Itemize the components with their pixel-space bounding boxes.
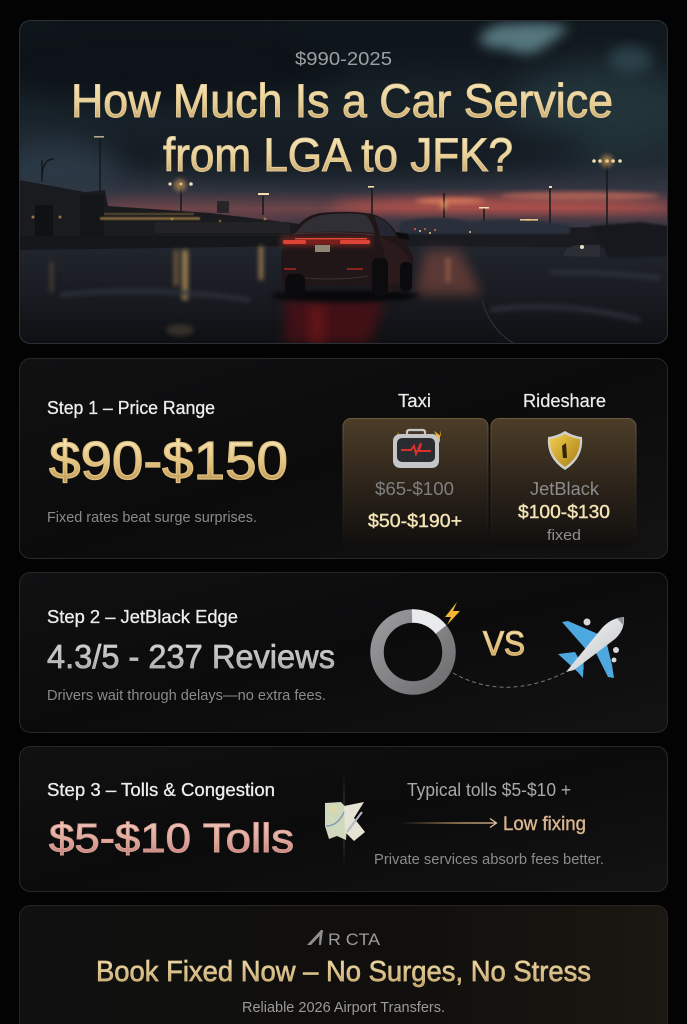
step 1 price: $90-$150 xyxy=(49,431,288,491)
tolls line: Typical tolls $5-$10 + xyxy=(407,780,571,800)
panel: step 1 price range xyxy=(20,358,668,558)
low fixing label: Low fixing xyxy=(503,814,586,835)
comparison column: rideshare / JetBlack: Rideshare xyxy=(523,391,606,411)
comparison column: taxi xyxy=(343,391,488,548)
cta eyebrow with logo mark xyxy=(307,930,381,949)
hero title: How Much Is a Car Service xyxy=(71,74,613,127)
car rear view xyxy=(271,212,419,302)
comparison column: rideshare / JetBlack xyxy=(491,391,636,548)
hero subtitle: $990-2025 xyxy=(295,49,392,69)
comparison column: rideshare / JetBlack: $100-$130 xyxy=(518,501,610,522)
comparison column: taxi: Taxi xyxy=(398,391,431,411)
step 2 rating: 4.3/5 - 237 Reviews xyxy=(47,638,335,675)
step 1 note: Fixed rates beat surge surprises. xyxy=(47,510,257,526)
icon: gold shield xyxy=(548,431,582,470)
hero title: from LGA to JFK? xyxy=(163,128,513,181)
icon: lightning bolt xyxy=(445,602,460,625)
panel: step 3 tolls and congestion xyxy=(20,746,668,892)
comparison column: taxi: $65-$100 xyxy=(375,478,454,499)
icon: taxi meter with lightning xyxy=(393,430,441,468)
panel: hero photo with title xyxy=(0,20,687,344)
arrow xyxy=(400,818,496,828)
cta headline: Book Fixed Now – No Surges, No Stress xyxy=(96,956,591,988)
cta note: Reliable 2026 Airport Transfers. xyxy=(242,1000,445,1016)
hero title xyxy=(71,74,613,181)
comparison column: rideshare / JetBlack: JetBlack xyxy=(530,478,600,499)
panel: step 2 JetBlack edge xyxy=(20,572,668,732)
step 2 heading: Step 2 – JetBlack Edge xyxy=(47,606,238,627)
icon: folded map xyxy=(325,802,365,841)
skyline lights and poles xyxy=(19,136,668,258)
ring gauge xyxy=(377,616,449,688)
comparison column: rideshare / JetBlack: fixed xyxy=(547,527,581,544)
step 3 heading: Step 3 – Tolls & Congestion xyxy=(47,779,275,800)
wet pavement reflections xyxy=(50,246,660,344)
dashed flight path xyxy=(453,672,566,687)
vs label: VS xyxy=(483,625,525,663)
icon: airplane xyxy=(558,617,624,678)
step 2 note: Drivers wait through delays—no extra fees. xyxy=(47,688,326,704)
comparison column: taxi: $50-$190+ xyxy=(368,510,462,531)
step 1 heading: Step 1 – Price Range xyxy=(47,397,215,418)
step 3 price: $5-$10 Tolls xyxy=(49,815,294,861)
step 3 note: Private services absorb fees better. xyxy=(374,852,604,868)
cta eyebrow with logo mark: R CTA xyxy=(328,930,381,949)
panel: call to action xyxy=(20,906,668,1024)
terminal building xyxy=(20,180,300,236)
